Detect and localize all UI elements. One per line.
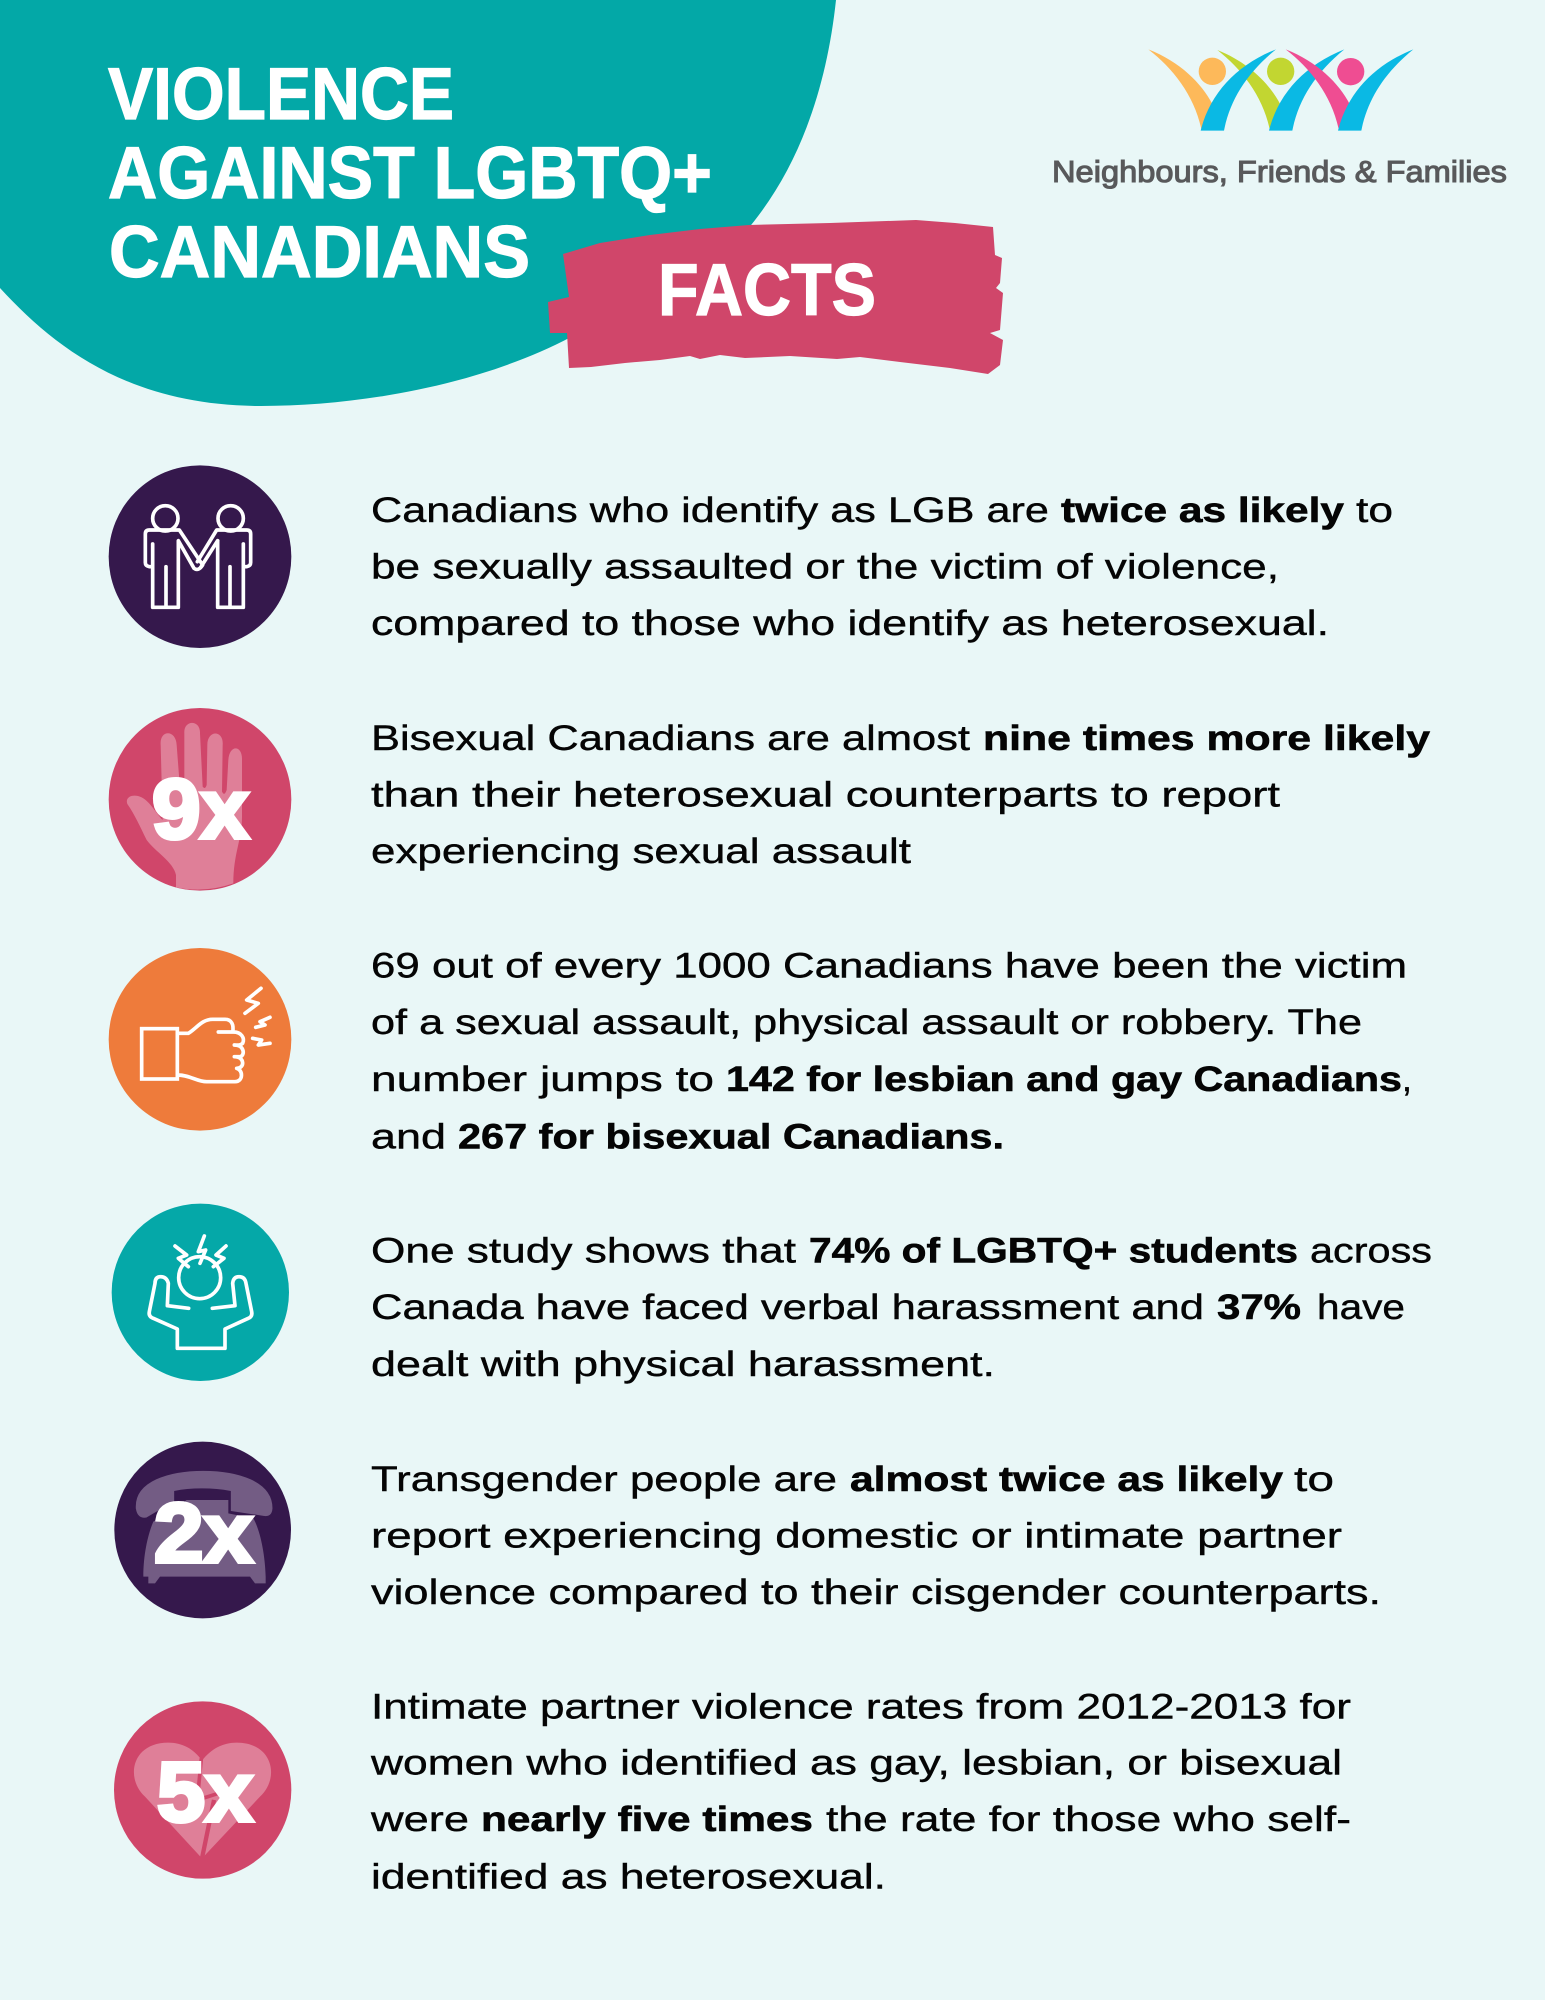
fact text 1: Canadians who identify as LGB are [371,490,1049,530]
title: AGAINST LGBTQ+ [108,133,712,214]
fact text 1: twice as likely [1061,490,1344,530]
fact text 4 [371,1230,1432,1384]
fact text 5: almost twice as likely [850,1459,1283,1499]
fact text 2: than their heterosexual counterparts to report [371,774,1280,814]
icon: hand with 9x: 9x [152,762,249,856]
fact text 3: and [371,1116,446,1156]
fact text 6: identified as heterosexual. [371,1856,886,1896]
fact row 6 [114,1686,1351,1896]
title: VIOLENCE [108,54,454,135]
facts brush badge: FACTS [658,250,876,331]
title: CANADIANS [109,212,530,293]
fact text 4: One study shows that [371,1230,796,1270]
fact text 5: report experiencing domestic or intimate partner [371,1516,1342,1556]
fact text 2: nine times more likely [983,718,1430,758]
icon: stressed person [112,1204,289,1381]
logo: Neighbours, Friends & Families [1052,49,1507,189]
fact row 1 [109,465,1393,648]
title [108,54,712,293]
icon: two people holding hands [109,465,291,648]
logo wordmark: Neighbours, Friends & Families [1052,154,1507,189]
fact text 1: to [1356,490,1393,530]
fact text 4: 74% of LGBTQ+ students [809,1230,1298,1270]
fact text 5: violence compared to their cisgender counterparts. [371,1572,1381,1612]
fact text 2: experiencing sexual assault [371,831,911,871]
fact text 3: 69 out of every 1000 Canadians have been the victim [371,946,1407,986]
fact row 3 [109,946,1412,1156]
fact text 5 [371,1459,1381,1612]
icon: telephone with 2x: 2x [154,1486,253,1580]
fact text 6: women who identified as gay, lesbian, or bisexual [370,1742,1342,1782]
fact row 5 [114,1442,1381,1618]
fact row 2 [109,708,1430,891]
fact text 5: Transgender people are [371,1459,837,1499]
header teal blob [0,0,836,406]
fact text 3: 142 for lesbian and gay Canadians [726,1059,1402,1099]
fact text 2 [371,718,1430,871]
fact text 6: were [370,1799,469,1839]
icon: broken heart with 5x [114,1701,291,1879]
fact text 6: the rate for those who self- [826,1799,1351,1839]
icon: telephone with 2x [114,1442,291,1618]
fact text 3 [371,946,1412,1156]
fact text 3: , [1402,1059,1412,1099]
fact text 1: be sexually assaulted or the victim of violence, [371,546,1279,586]
fact text 2: Bisexual Canadians are almost [371,718,970,758]
fact text 1: compared to those who identify as heterosexual. [371,603,1329,643]
fact text 4: Canada have faced verbal harassment and [371,1287,1204,1327]
fact text 4: 37% [1217,1287,1301,1327]
fact text 6 [370,1686,1351,1896]
icon: broken heart with 5x: 5x [157,1745,253,1839]
icon: hand with 9x [109,708,291,891]
fact text 6: Intimate partner violence rates from 2012-2013 for [371,1686,1351,1726]
fact text 4: dealt with physical harassment. [371,1344,995,1384]
fact row 4 [112,1204,1432,1384]
facts brush badge [548,220,1003,374]
fact text 4: across [1310,1230,1432,1270]
fact text 6: nearly five times [481,1799,813,1839]
fact text 3: of a sexual assault, physical assault or robbery. The [371,1002,1362,1042]
fact text 5: to [1294,1459,1334,1499]
fact text 1 [371,490,1393,643]
fact text 3: number jumps to [371,1059,714,1099]
fact text 3: 267 for bisexual Canadians. [458,1116,1004,1156]
fact text 4: have [1317,1287,1405,1327]
logo mark [1148,49,1413,131]
icon: fist with impact bolts [109,948,291,1131]
